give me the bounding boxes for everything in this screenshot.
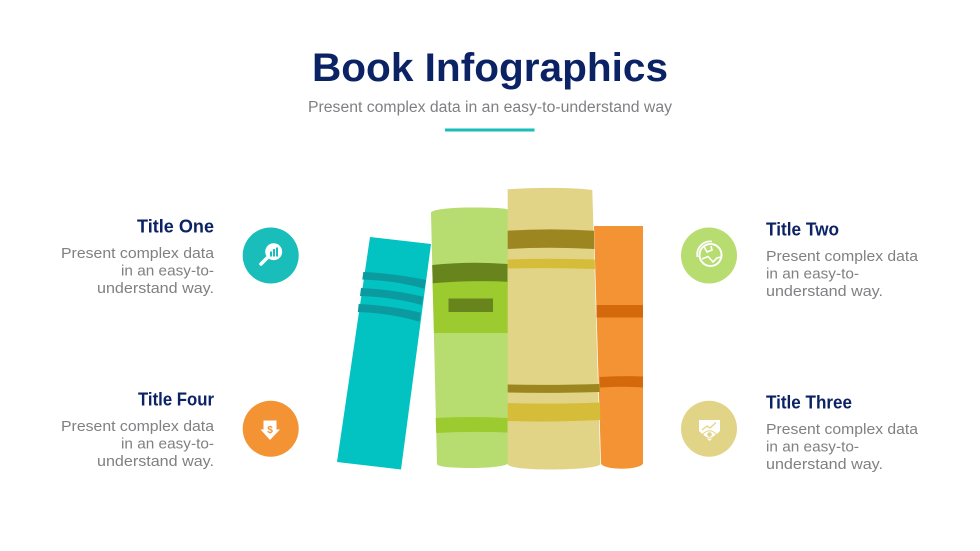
- body text: Title Three: [766, 421, 919, 473]
- illustration: row of books: [337, 188, 643, 470]
- body text: Title Four: [61, 418, 215, 470]
- book: green: [431, 208, 508, 468]
- heading: Title Two: Title Two: [766, 220, 839, 240]
- block: Title Two: [766, 220, 919, 300]
- book: teal leaning: [337, 237, 431, 470]
- body text: Title Three: understand way.: [766, 456, 883, 473]
- book: orange: [594, 226, 643, 469]
- body text: Title Four: Present complex data: [61, 418, 215, 435]
- subtitle: Present complex data in an easy-to-understand way: [308, 99, 672, 116]
- icon: chart shield with eye: [681, 401, 737, 457]
- body text: Title Two: understand way.: [766, 283, 883, 300]
- body text: Title Three: in an easy-to-: [766, 438, 859, 456]
- icon: dollar down arrow: $: [267, 425, 273, 436]
- title: Book Infographics: [312, 46, 668, 90]
- icon: magnifier with bars: [243, 228, 299, 284]
- body text: Title One: Present complex data: [61, 245, 215, 262]
- body text: Title Two: Present complex data: [766, 248, 919, 265]
- book: tan: [508, 188, 600, 470]
- body text: Title One: [61, 245, 215, 297]
- heading: Title Three: Title Three: [766, 392, 852, 412]
- block: Title Four: [61, 390, 215, 470]
- body text: Title Three: Present complex data: [766, 421, 919, 438]
- body text: Title Four: understand way.: [97, 453, 214, 470]
- icon: globe: [681, 228, 737, 284]
- body text: Title Two: in an easy-to-: [766, 266, 859, 282]
- body text: Title Four: in an easy-to-: [121, 436, 214, 452]
- heading: Title Four: Title Four: [138, 390, 214, 410]
- body text: Title One: understand way.: [97, 280, 214, 297]
- heading: Title One: Title One: [137, 216, 214, 236]
- block: Title Three: [766, 392, 919, 473]
- body text: Title Two: [766, 248, 919, 300]
- body text: Title One: in an easy-to-: [121, 262, 214, 280]
- block: Title One: [61, 216, 215, 297]
- title accent line: [445, 128, 534, 132]
- icon: dollar down arrow: [243, 401, 299, 457]
